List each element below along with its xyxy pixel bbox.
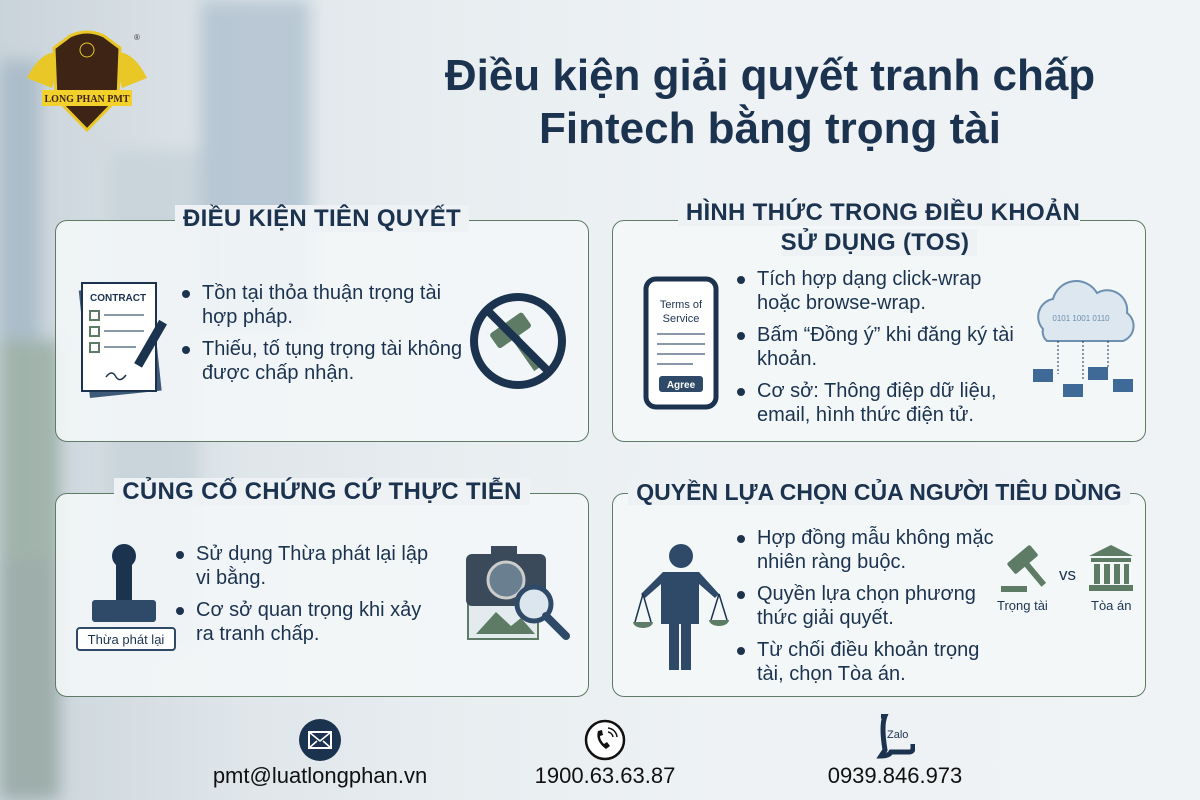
icon: phone terms: Service (663, 313, 699, 325)
contact: zalo: 0939.846.973 (828, 763, 962, 788)
panel title: ĐIỀU KIỆN TIÊN QUYẾT (183, 205, 461, 232)
icon: camera magnifier (466, 546, 570, 640)
text block: Sử dụng Thừa phát lại lập vi bằng. (196, 543, 428, 589)
text block: Hợp đồng mẫu không mặc nhiên ràng buộc. (757, 527, 994, 573)
icon: phone terms (644, 276, 718, 410)
text block: Cơ sở: Thông điệp dữ liệu, email, hình thức điện tử. (757, 380, 996, 426)
panel: dieu kien tien quyet (55, 220, 589, 442)
text block: Tồn tại thỏa thuận trọng tài hợp pháp. (202, 282, 441, 328)
panel title (678, 198, 1080, 256)
text block: Cơ sở quan trọng khi xảy ra tranh chấp. (196, 599, 421, 645)
panel: hinh thuc TOS (612, 220, 1146, 442)
icon: cloud data: 0101 1001 0110 (1052, 314, 1110, 323)
panel title: QUYỀN LỰA CHỌN CỦA NGƯỜI TIÊU DÙNG (636, 479, 1122, 505)
title: Điều kiện giải quyết tranh chấp (445, 51, 1095, 100)
text block: Quyền lựa chọn phương thức giải quyết. (757, 583, 976, 629)
icon: stamp (76, 544, 176, 651)
text block (176, 543, 428, 645)
icon: businessman with scales (633, 544, 729, 670)
title: Fintech bằng trọng tài (539, 104, 1001, 153)
icon: contract (78, 282, 167, 398)
icon: arbitration vs court: Tòa án (1091, 598, 1131, 613)
contact: email: pmt@luatlongphan.vn (213, 763, 427, 788)
contact: email (213, 719, 427, 788)
text block (737, 526, 994, 685)
icon: stamp: Thừa phát lại (88, 632, 164, 647)
text block: Thiếu, tố tụng trọng tài không được chấp nhận. (202, 338, 462, 384)
panel: cung co chung cu (55, 493, 589, 697)
text block: Tích hợp dạng click-wrap hoặc browse-wrap. (757, 268, 981, 314)
icon: contract: CONTRACT (90, 293, 146, 304)
logo (27, 30, 147, 132)
title (445, 51, 1095, 153)
contact: zalo (828, 714, 962, 788)
icon: arbitration vs court (997, 545, 1133, 613)
logo: LONG PHAN PMT (44, 94, 130, 105)
icon: phone terms: Agree (667, 380, 696, 391)
icon: arbitration vs court: vs (1059, 565, 1076, 584)
contact: phone: 1900.63.63.87 (535, 763, 675, 788)
text block (737, 268, 1014, 426)
text block: Từ chối điều khoản trọng tài, chọn Tòa án. (757, 639, 979, 685)
contact: phone (535, 720, 675, 788)
panel title: HÌNH THỨC TRONG ĐIỀU KHOẢN (686, 199, 1080, 226)
icon: cloud data (1033, 280, 1135, 397)
icon: phone terms: Terms of (660, 299, 703, 311)
logo: ® (134, 33, 140, 42)
text block: Bấm “Đồng ý” khi đăng ký tài khoản. (757, 324, 1014, 370)
panel title: CỦNG CỐ CHỨNG CỨ THỰC TIỄN (122, 478, 522, 505)
icon: no gavel (470, 293, 566, 389)
panel: quyen lua chon (612, 493, 1146, 697)
panel title: SỬ DỤNG (TOS) (781, 229, 969, 256)
icon: arbitration vs court: Trọng tài (997, 598, 1048, 613)
text block (182, 282, 462, 384)
contact: zalo: Zalo (887, 729, 908, 741)
